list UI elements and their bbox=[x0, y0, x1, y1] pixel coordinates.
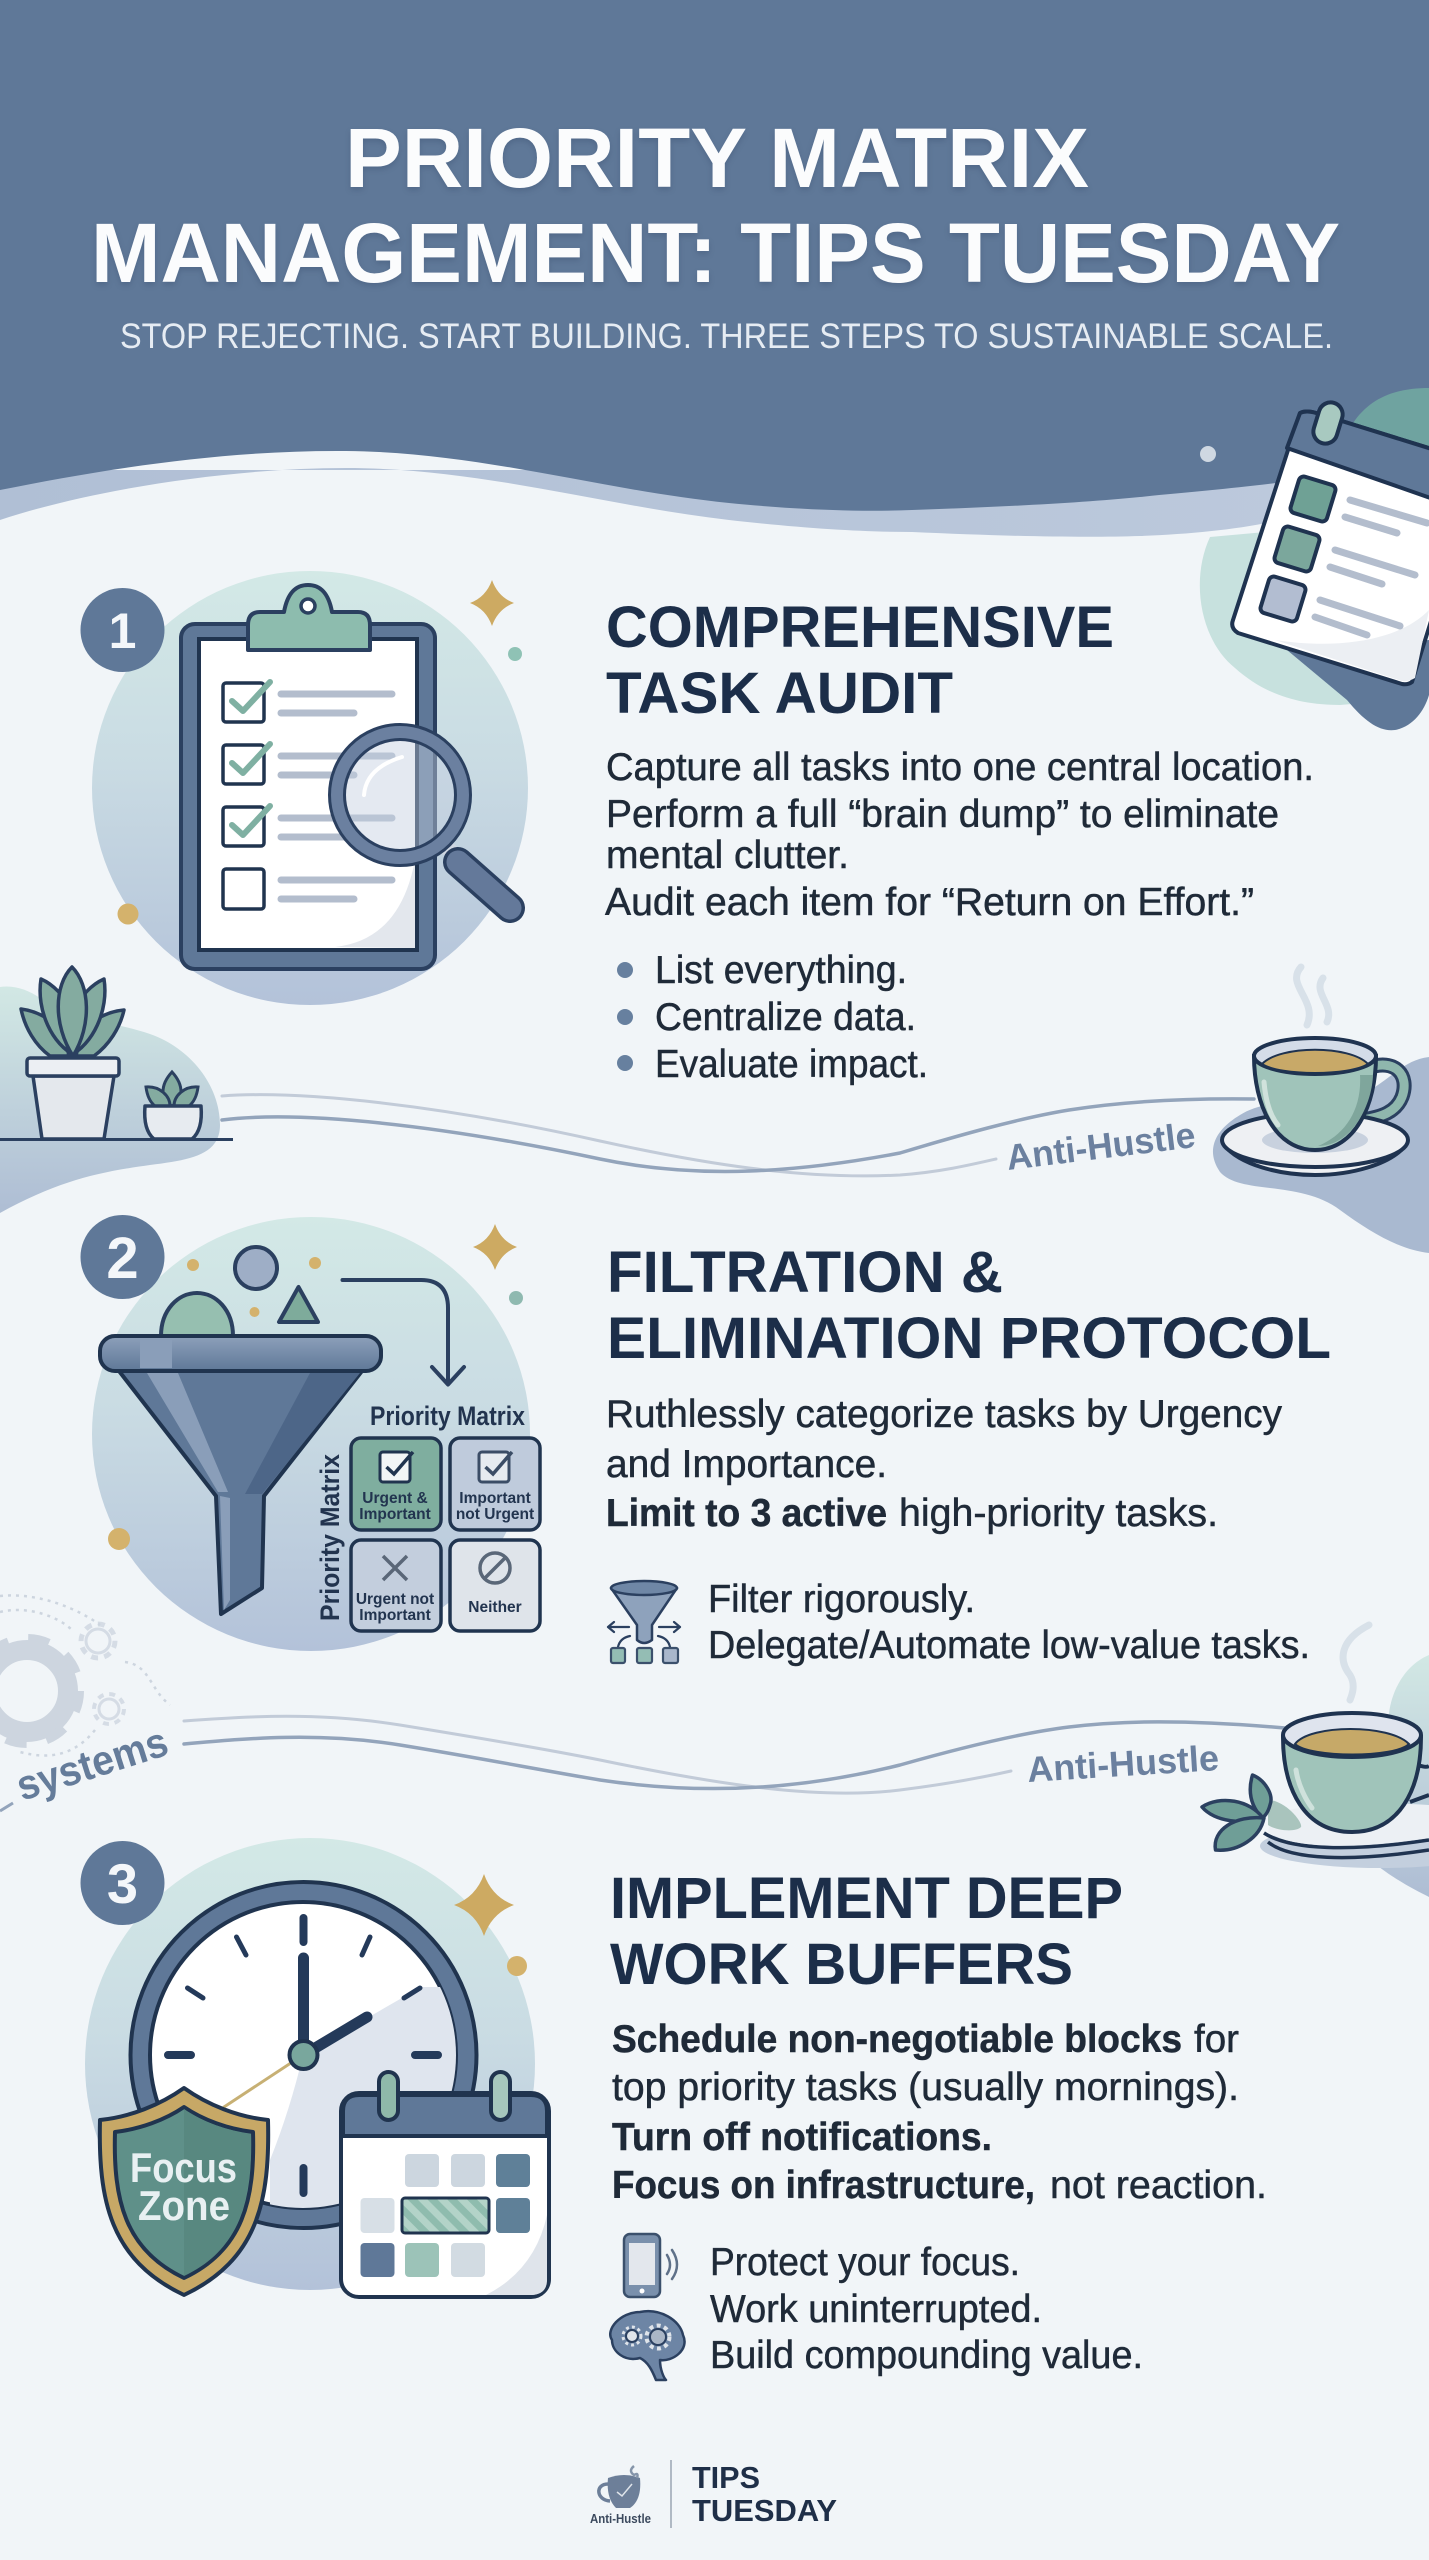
matrix cell: important not urgent bbox=[450, 1438, 540, 1530]
divider waves 1 bbox=[222, 1095, 1254, 1176]
body copy: high-priority tasks. bbox=[899, 1492, 1218, 1535]
takeaways: Delegate/Automate low-value tasks. bbox=[708, 1624, 1310, 1667]
body copy bbox=[605, 746, 1314, 924]
decoration: gears bbox=[0, 1595, 170, 1756]
heading: ELIMINATION PROTOCOL bbox=[607, 1306, 1331, 1371]
matrix cell: urgent not important: Important bbox=[359, 1607, 431, 1624]
body copy bbox=[606, 1393, 1282, 1535]
matrix side label: Priority Matrix bbox=[315, 1454, 345, 1621]
heading: IMPLEMENT DEEP bbox=[610, 1866, 1123, 1931]
label: Anti-Hustle 1: Anti-Hustle bbox=[1004, 1114, 1198, 1178]
icon: Anti-Hustle cup bbox=[599, 2466, 640, 2508]
illustration: tea cup 1 bbox=[1213, 967, 1429, 1253]
title: PRIORITY MATRIX bbox=[345, 111, 1089, 205]
body copy: top priority tasks (usually mornings). bbox=[612, 2066, 1239, 2109]
subtitle: STOP REJECTING. START BUILDING. THREE STEPS TO SUSTAINABLE SCALE. bbox=[120, 317, 1333, 356]
heading bbox=[607, 1240, 1331, 1371]
matrix cell: important not urgent: not Urgent bbox=[456, 1506, 534, 1523]
heading bbox=[610, 1866, 1123, 1997]
body copy: not reaction. bbox=[1050, 2164, 1267, 2207]
body copy: Audit each item for “Return on Effort.” bbox=[605, 881, 1254, 924]
body copy: Limit to 3 active bbox=[606, 1492, 887, 1535]
background circle bbox=[92, 571, 528, 1005]
body copy: Capture all tasks into one central location. bbox=[606, 746, 1314, 789]
body copy: mental clutter. bbox=[606, 834, 849, 877]
arrow to matrix bbox=[342, 1280, 464, 1384]
matrix cell: urgent not important: Urgent not bbox=[356, 1591, 434, 1608]
bullet list: Evaluate impact. bbox=[655, 1043, 928, 1086]
header band bbox=[0, 0, 1429, 537]
heading: FILTRATION & bbox=[607, 1240, 1003, 1305]
takeaways bbox=[708, 1578, 1310, 1667]
title bbox=[91, 111, 1340, 300]
heading: WORK BUFFERS bbox=[610, 1932, 1073, 1997]
label: systems: systems bbox=[11, 1718, 173, 1810]
takeaways: Work uninterrupted. bbox=[710, 2288, 1042, 2331]
matrix cell: urgent and important bbox=[351, 1438, 441, 1530]
heading: COMPREHENSIVE bbox=[606, 595, 1114, 660]
panel: step 2 text bbox=[606, 1240, 1331, 1667]
body copy: Ruthlessly categorize tasks by Urgency bbox=[606, 1393, 1282, 1436]
panel: step 1 illustration bbox=[80, 571, 528, 1005]
matrix top label: Priority Matrix bbox=[370, 1401, 525, 1431]
illustration: tea cup 2 with leaves bbox=[1202, 1625, 1429, 1897]
body copy: Focus on infrastructure, bbox=[612, 2164, 1035, 2207]
heading bbox=[606, 595, 1114, 726]
number badge 3 bbox=[80, 1841, 164, 1925]
bullet list: List everything. bbox=[655, 949, 907, 992]
number badge 1 bbox=[80, 588, 164, 672]
body copy: Schedule non-negotiable blocks bbox=[612, 2018, 1182, 2061]
body copy: and Importance. bbox=[606, 1443, 887, 1486]
illustration: tilted calendar bbox=[1200, 388, 1429, 730]
matrix cell: neither bbox=[450, 1540, 540, 1631]
background circle bbox=[85, 1838, 535, 2290]
matrix cell: urgent not important bbox=[351, 1540, 441, 1631]
panel: step 2 illustration bbox=[80, 1215, 540, 1651]
bullet list: Centralize data. bbox=[655, 996, 916, 1039]
footer logo: TIPS bbox=[692, 2460, 760, 2495]
label: Anti-Hustle 2: Anti-Hustle bbox=[1026, 1737, 1220, 1790]
body copy: for bbox=[1194, 2018, 1239, 2061]
decorations: star and dots bbox=[108, 1224, 523, 1550]
illustration: potted plants on shelf bbox=[0, 967, 233, 1213]
footer logo: TUESDAY bbox=[692, 2493, 837, 2528]
takeaways bbox=[710, 2241, 1143, 2377]
decorations: star and dots bbox=[118, 580, 522, 924]
bullet list bbox=[617, 949, 928, 1086]
panel: step 3 text bbox=[610, 1866, 1267, 2380]
icon: focus zone shield: Focus bbox=[130, 2144, 237, 2191]
icon: funnel bbox=[100, 1336, 381, 1614]
number badge 2 bbox=[80, 1215, 164, 1299]
number badge 3: 3 bbox=[107, 1852, 138, 1915]
footer logo bbox=[590, 2460, 837, 2528]
panel: step 1 text bbox=[605, 595, 1314, 1086]
takeaways: Protect your focus. bbox=[710, 2241, 1020, 2284]
background circle bbox=[92, 1217, 530, 1651]
heading: TASK AUDIT bbox=[606, 661, 953, 726]
takeaways: Build compounding value. bbox=[710, 2334, 1143, 2377]
icon: clipboard bbox=[181, 585, 435, 969]
icon: header dot bbox=[1200, 446, 1216, 462]
divider waves 2 bbox=[184, 1716, 1285, 1793]
takeaways: Filter rigorously. bbox=[708, 1578, 975, 1621]
body copy: Perform a full “brain dump” to eliminate bbox=[606, 793, 1279, 836]
icon: magnifying glass bbox=[337, 732, 510, 908]
icon: focus zone shield bbox=[100, 2088, 268, 2295]
panel: step 3 illustration bbox=[80, 1838, 549, 2297]
decorations: star and dot bbox=[454, 1874, 527, 1976]
title: MANAGEMENT: TIPS TUESDAY bbox=[91, 206, 1340, 300]
body copy: Turn off notifications. bbox=[612, 2116, 992, 2159]
body copy bbox=[612, 2018, 1267, 2207]
footer logo: Anti-Hustle bbox=[590, 2511, 651, 2526]
number badge 1: 1 bbox=[109, 603, 136, 659]
falling shapes bbox=[161, 1247, 321, 1336]
icon: calendar bbox=[341, 2072, 549, 2297]
icon: clock bbox=[130, 1882, 476, 2228]
icon: brain with gears bbox=[610, 2311, 685, 2380]
matrix cell: urgent and important: Important bbox=[359, 1506, 431, 1523]
number badge 2: 2 bbox=[106, 1226, 139, 1291]
matrix cell: urgent and important: Urgent & bbox=[362, 1490, 428, 1507]
icon: small funnel bbox=[608, 1581, 680, 1663]
icon: focus zone shield: Zone bbox=[138, 2182, 230, 2229]
icon: phone bbox=[624, 2234, 677, 2297]
matrix cell: neither: Neither bbox=[468, 1599, 522, 1616]
matrix cell: important not urgent: Important bbox=[459, 1490, 531, 1507]
